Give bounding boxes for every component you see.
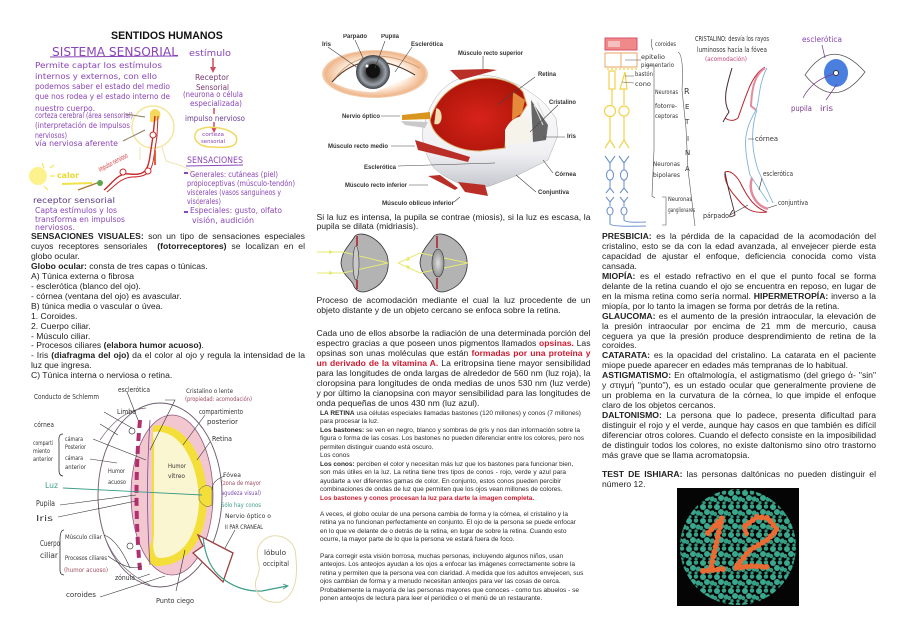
text block: trastornos de la vision: miope puede aparecer en edades más tempranas de lo habitual. [602,360,848,370]
labels: pupila [791,104,812,113]
labels: comparti [33,439,53,447]
text block: proceso de acomodacion [316,295,590,315]
labels: Sólo hay conos [221,502,261,509]
text block: la retina: Los bastones y conos procesan la luz para darte la imagen completa. [320,495,534,502]
text block: anteojos: anteojos. Los anteojos ayudan a los ojos a enfocar las imágenes correctamente sobre la [320,561,575,568]
text block: la retina: son más útiles en la luz. La retina tiene tres tipos de conos - rojo, verde y azul para [320,469,566,476]
labels: anterior [33,455,53,463]
text block: trastornos de la vision: CATARATA: es la opacidad del cristalino. La catarata en el paciente [602,350,876,360]
heading: cristalino: luminosos hacia la fóvea [697,46,767,54]
text block: anteojos: retina y permiten que la persona vea con claridad. A medida que los adultos envejecen, sus [320,570,583,577]
text block: opsinas: para las longitudes de onda largas de alrededor de 560 nm (luz roja), la [316,368,590,378]
figure: retina layers [604,38,695,226]
retina labels: ganglionares [668,207,695,214]
labels: Cuerpo [40,539,60,548]
text block: sensaciones visuales y globo ocular: - córnea (ventana del ojo) es avascular. [31,291,181,301]
text block: trastornos de la vision: la presión intraocular por encima de 21 mm de mercurio, causa [602,321,876,331]
layer: epitelio pigmentario [605,53,637,67]
anatomical labels [322,34,577,207]
eye outline and iris [805,54,865,93]
text block: trastornos de la vision: número 12. [602,479,645,489]
text block: vision fuera de foco: ocurre, la mayor parte de lo que la persona ve estará fuera de foco. [320,536,514,543]
list: sensaciones: Especiales: gusto, olfato [190,206,282,215]
text block: sensaciones visuales y globo ocular: globo ocular. [31,251,80,261]
labels: Nervio óptico o [225,513,271,520]
drawing: upper lid and cornea [723,67,773,203]
text block: receptor sensorial: receptor sensorial [33,196,115,205]
labels: párpado [703,212,729,220]
anatomical labels: Córnea [555,172,577,178]
retina labels [635,40,695,214]
heading: cristalino: (acomodación) [705,56,747,63]
labels: esclerótica [802,34,842,44]
retina labels: Neuronas [668,196,692,203]
flow: estimulo to corteza sensorial: corteza [202,132,224,138]
light path arrow [63,488,288,591]
retina labels: T [684,118,690,126]
flow: estimulo to corteza sensorial: sensorial [201,139,225,145]
retina labels: coroides [655,40,676,48]
text block: la retina: LA RETINA usa células especiales llamadas bastones (120 millones) y conos (7 millones) [320,410,581,417]
labels: posterior [207,418,238,426]
labels: Conducto de Schlemm [34,393,99,401]
labels: miento [33,447,50,455]
text block: sensaciones visuales y globo ocular [31,231,306,380]
sectioned eyeball [401,69,558,196]
labels: (humor acuoso) [64,567,108,574]
text block: vision fuera de foco [320,511,576,543]
figure: anatomical eye with labels [322,34,577,207]
text block: opsinas: onda pequeñas de unos 430 nm (luz azul). [316,398,479,408]
text block: trastornos de la vision: ceguera ya que la presión produce desprendimiento de retina de la [602,331,876,341]
cells: conos y bastones [604,69,637,148]
text block: sensaciones visuales y globo ocular: - Músculo ciliar. [31,331,90,341]
anatomical labels: Cristalino [549,100,576,106]
text block: pupila [316,212,591,231]
text block: opsinas: Cada uno de ellos absorbe la radiación de una determinada porción del [316,328,590,338]
retina labels: fotorre- [655,103,677,110]
heading: cristalino [695,35,769,63]
labels: cámara [65,454,83,462]
text block: trastornos de la vision: ASTIGMATISMO: En oftalmología, el astigmatismo (del griego ἀ- "sin" [602,370,876,380]
labels: iris [820,104,833,113]
text block: anteojos: Para corregir esta visión borrosa, muchas personas, incluyendo algunos niños, usan [320,553,563,560]
labels: Posterior [65,443,86,451]
list: sensaciones [184,156,295,225]
text block: sensaciones visuales y globo ocular: luz que ingresa. [31,360,92,370]
label leader lines [328,40,565,202]
anatomical labels: Músculo recto inferior [345,183,408,189]
labels: Procesos ciliares [65,554,107,562]
text block: anteojos: ojos cambian de forma y a menudo necesitan anteojos para ver las cosas de cerca. [320,578,561,585]
labels: córnea [755,135,778,143]
text block: trastornos de la vision: delante de la retina cuando el ojo se encuentra en reposo, en lugar de [602,281,876,291]
text block: sistema sensorial definition: corteza cerebral (área sensorial) [35,111,133,120]
labels: Luz [45,481,58,490]
labels: anterior [65,463,86,471]
layer: coroides [605,38,637,50]
text block: trastornos de la vision: un problema en la curvatura de la córnea, lo que impide el enfoque [602,390,876,400]
figure: accommodation diagram, near object [398,234,468,292]
anatomical labels: Iris [322,42,332,48]
labels: Humor [168,463,186,470]
optic nerve [193,535,233,582]
text block: receptor sensorial: transforma en impulsos [35,215,125,224]
labels [33,386,271,605]
text block: trastornos de la vision: cansada. [602,261,637,271]
text block: proceso de acomodacion: Proceso de acomodación mediante el cual la luz procedente de un [316,295,590,305]
text block: trastornos de la vision: distinguir el rojo y el verde, aunque hay casos en que también es difícil [602,420,876,430]
retina labels: Neuronas [653,161,680,168]
flow: estimulo to corteza sensorial: especializada) [190,99,242,108]
anatomical labels: Iris [567,134,577,140]
text block: sistema sensorial definition: nuestro cuerpo. [35,104,95,113]
text block: trastornos de la vision: cristalino, esto se da con la edad avanzada, al envejecer pierde esta [602,241,876,251]
text block: receptor sensorial: Capta estímulos y los [35,206,117,215]
text block: trastornos de la vision: diferenciar otros colores. Cuando el defecto consiste en la imposibilidad [602,430,876,440]
label: impulso nervioso: impulso nervioso [97,152,129,174]
text block: sistema sensorial definition [35,61,170,148]
text block: trastornos de la vision: más grave que se llama acromatopsia. [602,450,750,460]
retina labels: N [685,149,690,157]
labels: Punto ciego [156,597,194,605]
eyeball cross-section [98,403,222,587]
figure: Ishihara plate [677,488,799,606]
list: sensaciones: viscerales (vasos sanguíneos y [187,188,281,197]
labels [703,135,808,220]
labels [791,34,842,113]
icon: sun calor [29,163,92,190]
list: sensaciones: SENSACIONES [187,156,243,166]
labels: cámara [65,435,83,443]
anatomical labels: Pupila [381,34,400,40]
labels: agudeza visual) [221,490,261,497]
retina labels: E [685,103,689,111]
anatomical labels: Párpado [343,34,367,40]
text block: sistema sensorial definition: Permite captar los estímulos [35,61,162,70]
leader lines and brackets [44,392,235,597]
text block: sensaciones visuales y globo ocular: B) túnica media o vascular o úvea. [31,301,163,311]
text block: sensaciones visuales y globo ocular: Globo ocular: consta de tres capas o túnicas. [31,261,208,271]
text block: sistema sensorial definition: vía nerviosa aferente [35,139,118,148]
figure: sistema sensorial diagram [29,45,295,232]
text block: trastornos de la vision: en la misma retina como sería normal. HIPERMETROPÍA: inverso a la [602,291,876,301]
labels: Retina [212,435,232,443]
text block: la retina: permiten distinguir cuando está oscuro. [320,444,433,451]
text block: trastornos de la vision: de distinguir todos los colores, no existe daltonismo sino otro trastorno [602,440,876,450]
retina labels: bipolares [653,172,680,179]
text block: sensaciones visuales y globo ocular: 2. Cuerpo ciliar. [31,321,91,331]
flow: estimulo to corteza sensorial: Receptor [195,73,230,82]
anatomical labels: Músculo recto superior [458,51,524,57]
text block: sensaciones visuales y globo ocular: 1. Coroides. [31,311,77,321]
text block: proceso de acomodacion: objeto distante y de un objeto cercano se enfoca sobre la retina. [316,305,561,315]
labels: vítreo [168,473,185,480]
labels: (propiedad: acomodación) [185,396,252,403]
retina labels: pigmentario [641,61,674,69]
text block: la retina: ayudarte a ver diferentes gamas de color. En conjunto, estos conos pueden percibir [320,478,561,485]
text block: trastornos de la vision: y στιγμή "punto"), es un estado ocular que generalmente proviene de [602,380,876,390]
retina labels: cono [635,80,651,88]
cells: neuronas bipolares y ganglionares [605,156,646,226]
list: sensaciones: propioceptivas (músculo-tendón) [187,179,295,188]
labels: coroides [66,591,96,599]
labels: córnea [34,421,54,429]
retina labels: ceptoras [655,113,678,120]
text block: anteojos [320,553,584,602]
text block: trastornos de la vision: coroides. [602,340,637,350]
text block: trastornos de la vision: PRESBICIA: es la pérdida de la capacidad de la acomodación del [602,231,876,241]
labels: Pupila [36,499,55,508]
labels: zónula [115,574,135,582]
illustration: human figure with sensory pathway [78,106,200,215]
labels: Fóvea [223,471,241,479]
text block: opsinas: cloropsina para longitudes de onda medias de unos 530 nm (luz verde) [316,378,590,388]
text block: trastornos de la vision: miopía, por lo tanto la imagen se forma por detrás de la retina. [602,301,839,311]
text block: trastornos de la vision [602,231,876,489]
text block: receptor sensorial: nerviosos. [35,223,75,232]
lobulo occipital [255,536,296,602]
figure: accommodation diagram, distant object [317,234,388,292]
labels: Limbo [117,408,136,416]
text block: la retina: Los bastones: se ven en negro, blanco y sombras de gris y nos dan información sobre la [320,427,580,434]
text block: la retina: para procesar la luz. [320,418,379,425]
text block: receptor sensorial [33,196,125,232]
list: sensaciones: Generales: cutáneas (piel) [190,170,278,179]
text block: sistema sensorial definition: (interpretación de impulsos [35,121,130,130]
labels: esclerótica [118,386,150,394]
text block: opsinas: espectro gracias a que poseen unos pigmentos llamados opsinas. Las [316,338,590,348]
labels: esclerótica [763,170,793,178]
text block: sensaciones visuales y globo ocular: - Iris (diafragma del ojo) da el color al ojo y regula la intensidad de la [31,350,305,360]
labels: ciliar [40,551,59,560]
text block: trastornos de la vision: claro de los objetos cercanos. [602,400,716,410]
labels: Músculo ciliar [65,533,102,541]
flow: estimulo to corteza sensorial: estímulo [189,49,232,59]
text block: la retina: figura o forma de las cosas. Los bastones no pueden diferenciar entre los colores, pero nos [320,435,584,442]
heading: sistema sensorial: SISTEMA SENSORIAL [52,45,178,59]
figure: hand-drawn cross-section of the eye [33,386,296,605]
text block: la retina: Los conos: perciben el color y necesitan más luz que los bastones para funcionar bien, [320,461,573,468]
flow: estimulo to corteza sensorial: Sensorial [196,83,229,92]
text block: vision fuera de foco: en lo que ve delante de o detrás de la retina, en lugar de sobre la retina. Cuando esto [320,528,566,535]
text block: la retina [320,410,584,502]
text block: trastornos de la vision: MIOPÍA: es el estado refractivo en el que el punto focal se forma [602,271,876,281]
labels: compartimiento [199,408,243,416]
text block: anteojos: ponen anteojos de lectura para leer el periódico o el menú de un restaurante. [320,595,542,602]
text block: trastornos de la vision: capacidad de ajustar el enfoque, deficiencia conocida como vista [602,251,876,261]
list: sensaciones: visión, audición [192,216,254,225]
labels: Humor [108,468,125,475]
text block: anteojos: Probablemente la mayoría de las personas mayores que conoces - como tus abuelos - se [320,587,579,594]
retina labels: Neuronas [655,89,678,96]
retina labels: R [684,87,690,96]
number 12 dots [703,517,777,571]
text block: opsinas: opsinas son unas moléculas que están formadas por una proteína y [316,348,590,358]
title: SENTIDOS HUMANOS [111,30,223,42]
text block: sensaciones visuales y globo ocular: cuyos receptores sensoriales (fotorreceptores) se localizan en el [31,241,305,251]
text block: sistema sensorial definition: que nos rodea y el estado interno de [35,92,170,101]
text block: vision fuera de foco: A veces, el globo ocular de una persona cambia de forma y la córnea, el cristalino y la [320,511,568,518]
retina labels: I [687,135,689,143]
text block: sistema sensorial definition: podemos saber el estado del medio [35,82,170,91]
text block: trastornos de la vision: GLAUCOMA: es el aumento de la presión intraocular, la elevación de [602,311,876,321]
anatomical labels: Retina [538,72,557,78]
flow: estimulo to corteza sensorial: (neurona o célula [183,90,243,99]
text block: la retina: Los conos [320,452,350,459]
text block: opsinas [316,328,591,408]
text block: trastornos de la vision: DALTONISMO: La persona que lo padece, presenta dificultad para [602,410,876,420]
retina brackets and leaders [622,39,695,226]
labels: II PAR CRANEAL [225,524,264,531]
text block: pupila: pupila se dilata (midriasis). [316,221,418,231]
text block: sistema sensorial definition: nerviosos) [35,131,67,140]
text block: sensaciones visuales y globo ocular: SENSACIONES VISUALES: son un tipo de sensaciones especiales [31,231,305,241]
heading: cristalino: CRISTALINO: desvía los rayos [695,35,769,43]
figure: cristalino and cornea section [695,35,808,220]
anatomical labels: Nervio óptico [342,114,380,120]
icon: sun calor: calor [57,171,79,180]
text block: opsinas: un derivado de la vitamina A. La eritropsina tiene mayor sensibilidad [316,358,591,368]
retina labels: A [685,165,690,173]
text block: sensaciones visuales y globo ocular: C) Túnica interna o nerviosa o retina. [31,370,172,380]
text block: pupila: Si la luz es intensa, la pupila se contrae (miosis), si la luz es escasa, la [316,212,590,222]
text block: vision fuera de foco: retina ya no funcionan perfectamente en conjunto. El ojo de la persona se puede enfocar [320,519,576,526]
anatomical labels: Esclerótica [411,42,444,48]
flow: estimulo to corteza sensorial [183,49,245,147]
labels: Iris [36,514,53,523]
list: sensaciones: viscerales) [187,197,221,206]
anatomical labels: Músculo recto medio [328,144,388,150]
text block: sensaciones visuales y globo ocular: - Procesos ciliares (elabora humor acuoso). [31,340,204,350]
external eye illustration [322,50,428,98]
text block: sistema sensorial definition: internos y externos, con ello [35,72,157,81]
lobulo occipital: lóbulo [264,549,286,557]
anatomical labels: Músculo oblicuo inferior [382,201,455,207]
labels: Cristalino o lente [186,387,233,395]
flow: estimulo to corteza sensorial: impulso nervioso [185,114,245,123]
labels: (zona de mayor [221,480,261,487]
lobulo occipital: occipital [263,560,289,568]
text block: opsinas: y por último la cianopsina con mayor sensibilidad para las longitudes de [316,388,590,398]
text block: sensaciones visuales y globo ocular: A) Túnica externa o fibrosa [31,271,134,281]
drawing: lower lid [725,172,768,217]
retina labels: bastón [635,70,653,78]
text block: sensaciones visuales y globo ocular: - esclerótica (blanco del ojo). [31,281,141,291]
anatomical labels: Conjuntiva [538,190,570,196]
labels: conjuntiva [778,199,808,207]
labels: acuoso [108,479,126,486]
text block: trastornos de la vision: TEST DE ISHIARA: las personas daltónicas no pueden distinguir el [602,469,876,479]
text block: la retina: combinaciones de ondas de luz que permiten que los ojos vean millones de colores. [320,486,562,493]
anatomical labels: Esclerótica [364,165,397,171]
retina labels: epitelio [641,53,665,61]
figure: frontal eye [791,34,865,113]
